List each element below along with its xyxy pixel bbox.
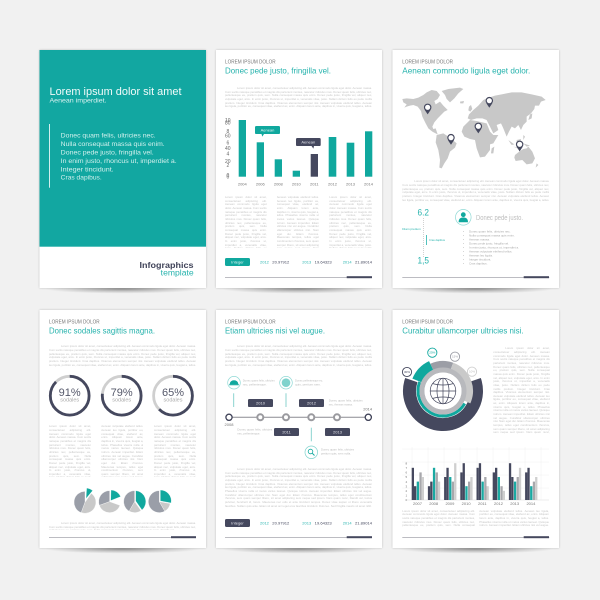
chart y axis labels: [225, 118, 231, 180]
chart x axis labels: 2010: [462, 501, 471, 506]
chart badges: 10%: [469, 370, 475, 374]
timeline notes: nec, Aenean massa.: [329, 403, 353, 407]
timeline notes: [237, 379, 363, 456]
chart y axis labels: 0: [226, 174, 230, 180]
group 2008: [428, 468, 440, 500]
chart x axis labels: 2006: [256, 182, 266, 186]
chart x axis labels: 2012: [328, 182, 338, 186]
stats row: 19.64323: [315, 520, 332, 525]
chart y axis labels: 20: [225, 159, 231, 165]
chart x axis labels: 2013: [346, 182, 356, 186]
page label: LOREM IPSUM DOLOR: [402, 319, 453, 325]
cover text list: Cras dapibus.: [61, 175, 102, 182]
chart x axis labels: 2007: [413, 501, 423, 506]
page heading: Donec pede justo, fringilla vel.: [225, 66, 331, 76]
stats row: Integer: [231, 520, 244, 525]
stats row: 2014: [343, 259, 352, 264]
timeline: 2008: [225, 422, 234, 427]
group 2009: [444, 463, 456, 500]
timeline notes: Donec quam felis, ultricies: [237, 427, 273, 431]
year boxes: 2012: [307, 400, 317, 406]
year boxes: 2013: [333, 430, 343, 434]
teal connectors: [234, 393, 311, 441]
list heading: Donec pede justo.: [476, 215, 523, 222]
page label: LOREM IPSUM DOLOR: [402, 59, 453, 65]
chart y axis: 3: [406, 484, 408, 488]
bullet list: •: [463, 233, 464, 237]
chart y axis labels: 10: [225, 118, 231, 124]
donut: 79%: sodales: [112, 398, 131, 404]
chart x axis labels: [238, 182, 374, 186]
stats row: 2013: [302, 259, 312, 264]
stats row: 2014: [343, 520, 352, 525]
chart y axis labels: 40: [225, 146, 231, 152]
pie chart 1: [74, 488, 96, 513]
chart y axis labels: 8: [226, 129, 230, 135]
pie chart 4: [148, 490, 171, 513]
pie chart 3: [124, 491, 146, 513]
panel: radial chart page: [392, 310, 559, 554]
cover title: Lorem ipsum dolor sit amet: [50, 86, 182, 98]
timeline notes: quis, pretium sem.: [295, 382, 321, 386]
chart x axis labels: 2014: [364, 182, 374, 186]
cover text list: Integer tincidunt.: [61, 166, 114, 173]
bullet list: Aenean vulputate eleifend tellus.: [469, 249, 513, 253]
pie charts: [74, 488, 171, 513]
radial chart: [400, 348, 486, 434]
icon: globe badge: [280, 376, 292, 389]
panel: percentages page: [40, 310, 206, 554]
year boxes: 2010: [256, 400, 266, 406]
icon: globe: [430, 378, 456, 404]
cover brand: template: [161, 268, 194, 277]
cover vertical rule: [48, 124, 51, 188]
icon: dome: [228, 376, 240, 389]
chart y axis labels: 0: [226, 173, 230, 179]
callout: dark Aenean: Aenean: [301, 140, 315, 144]
chart badges: 25%: [429, 351, 436, 355]
group 2014: [525, 468, 537, 500]
cover subtitle: Aenean imperdiet.: [50, 98, 107, 105]
panel: timeline page: [216, 310, 382, 554]
bullet list: •: [463, 261, 464, 265]
chart x axis labels: 2013: [510, 501, 520, 506]
stats row: 2012: [260, 520, 270, 525]
timeline: 2014: [363, 407, 373, 412]
stats row: 20.97912: [272, 520, 290, 525]
donut: 65%: 65%: [162, 387, 184, 399]
chart x axis labels: 2012: [494, 501, 504, 506]
group 2012: [493, 468, 505, 500]
callout: teal Aenean: [255, 126, 280, 137]
bullet list: Aenean massa.: [469, 237, 490, 241]
panel: cover page: [40, 50, 206, 294]
cover text list: Donec quam felis, ultricies nec.: [61, 133, 156, 140]
stats row: 21.89014: [355, 259, 373, 264]
timeline notes: pretium quis, sem nulla.: [321, 452, 351, 456]
donut: 65%: [154, 376, 192, 415]
bullet list: •: [463, 253, 464, 257]
chart x axis labels: 2008: [429, 501, 439, 506]
range scale: Cras dapibus: [429, 238, 445, 242]
bullet list: •: [463, 237, 464, 241]
cover text list: Nulla consequat massa quis enim.: [61, 141, 165, 148]
chart x axis labels: 2004: [238, 182, 248, 186]
chart y axis: 1: [406, 494, 408, 498]
page heading: Donec sodales sagittis magna.: [49, 326, 155, 336]
chart y axis: [406, 462, 408, 502]
bullet list: Donec pede justo, fringilla vel.: [469, 241, 509, 245]
chart y axis labels: 6: [226, 140, 230, 146]
group 2010: [460, 463, 473, 500]
panel: bar chart page: [216, 50, 382, 294]
chart x axis labels: 2010: [292, 182, 302, 186]
timeline notes: nec, pellentesque.: [243, 382, 267, 386]
chart y axis: 0: [406, 498, 408, 502]
grouped bar chart: [402, 447, 549, 506]
chart y axis: 4: [406, 480, 408, 484]
range scale: [402, 208, 445, 265]
page label: LOREM IPSUM DOLOR: [225, 59, 276, 65]
bullet list: •: [463, 249, 464, 253]
chart x axis labels: 2011: [310, 182, 319, 186]
page label: LOREM IPSUM DOLOR: [225, 319, 276, 325]
range scale: 6.2: [418, 208, 429, 218]
stats row: [225, 258, 373, 266]
map pins: [424, 97, 523, 150]
callout: dark Aenean: [296, 138, 321, 149]
donut: 91%: 91%: [59, 387, 81, 399]
bullet list: Donec quam felis, ultricies nec.: [469, 229, 511, 233]
chart x axis labels: 2014: [526, 501, 536, 506]
year boxes: 2011: [282, 430, 292, 434]
bullet list: Cras dapibus.: [469, 261, 488, 265]
callout: teal Aenean: Aenean: [261, 128, 274, 132]
chart y axis labels: 80: [225, 120, 231, 126]
cover text list: In enim justo, rhoncus ut, imperdiet a.: [61, 158, 177, 165]
chart y axis: 6: [406, 471, 408, 475]
stats row: [225, 519, 373, 527]
bullet list: •: [463, 245, 464, 249]
chart badges: 15%: [452, 355, 458, 359]
donut: 79%: 79%: [111, 387, 133, 399]
donut: 91%: sodales: [60, 398, 79, 404]
chart y axis labels: 2: [226, 163, 230, 169]
stats row: 2013: [302, 520, 312, 525]
bullet list: [463, 229, 519, 265]
timeline notes: Donec quam felis, ultricies: [243, 379, 275, 383]
page heading: Curabitur ullamcorper ultricies nisi.: [402, 326, 524, 336]
timeline: [225, 376, 373, 459]
group 2013: [509, 463, 521, 500]
chart y axis: 5: [406, 475, 408, 479]
cover teal block: [40, 50, 206, 247]
bullet list: •: [463, 241, 464, 245]
cover brand: [140, 261, 194, 277]
pie chart 2: [99, 490, 121, 513]
bar chart: [225, 118, 374, 186]
donut: 65%: sodales: [164, 398, 183, 404]
cover brand: Infographics: [140, 261, 194, 270]
chart y axis labels: 4: [226, 152, 230, 158]
chart badges: [402, 348, 477, 377]
chart y axis labels: 60: [225, 134, 231, 140]
page heading: Aenean commodo ligula eget dolor.: [402, 66, 530, 76]
range scale: Diam pretium: [402, 227, 421, 231]
cover text list: [61, 133, 177, 182]
chart y axis: 2: [406, 489, 408, 493]
stats row: 21.89014: [355, 520, 373, 525]
icon: magnifier: [305, 446, 318, 459]
stats row: 19.64323: [315, 259, 332, 264]
chart x axis labels: 2009: [445, 501, 455, 506]
stats row: 2012: [260, 259, 270, 264]
bullet list: •: [463, 257, 464, 261]
group 2007: [412, 468, 424, 500]
timeline notes: nec, pellentesque.: [237, 431, 260, 435]
timeline notes: Donec quam felis, ultricies: [329, 399, 363, 403]
world map: [402, 88, 546, 168]
page heading: Etiam ultricies nisi vel augue.: [225, 326, 325, 336]
bullet list: •: [463, 229, 464, 233]
timeline notes: Donec pellentesque eu,: [295, 379, 323, 383]
chart badges: 30%: [404, 370, 410, 374]
bullet list: Integer tincidunt.: [469, 257, 491, 261]
chart x axis labels: 2011: [478, 501, 487, 506]
range scale: 1,5: [418, 255, 429, 265]
bullet list: Nulla consequat massa quis enim.: [469, 233, 515, 237]
bullet list: Aenean leo ligula.: [469, 253, 493, 257]
cover text list: Donec pede justo, fringilla vel.: [61, 149, 154, 156]
chart x axis labels: [413, 501, 536, 506]
bullet list: In enim justo, rhoncus ut, imperdiet a.: [469, 245, 519, 249]
donut: 79%: [102, 376, 141, 415]
chart x axis labels: 2008: [274, 182, 284, 186]
page label: LOREM IPSUM DOLOR: [49, 319, 100, 325]
chart bars: [239, 120, 372, 177]
year boxes: [248, 399, 350, 436]
timeline notes: Donec quam felis, ultricies: [321, 448, 354, 452]
stats row: Integer: [231, 259, 244, 264]
chart y axis: 8: [406, 462, 408, 466]
group 2011: [476, 463, 489, 500]
stats row: 20.97912: [272, 259, 290, 264]
timeline nodes: [226, 414, 371, 420]
icon: person: [456, 210, 471, 225]
donut: 91%: [50, 376, 89, 415]
panel: world map page: [392, 50, 559, 294]
chart y axis: 7: [406, 466, 408, 470]
